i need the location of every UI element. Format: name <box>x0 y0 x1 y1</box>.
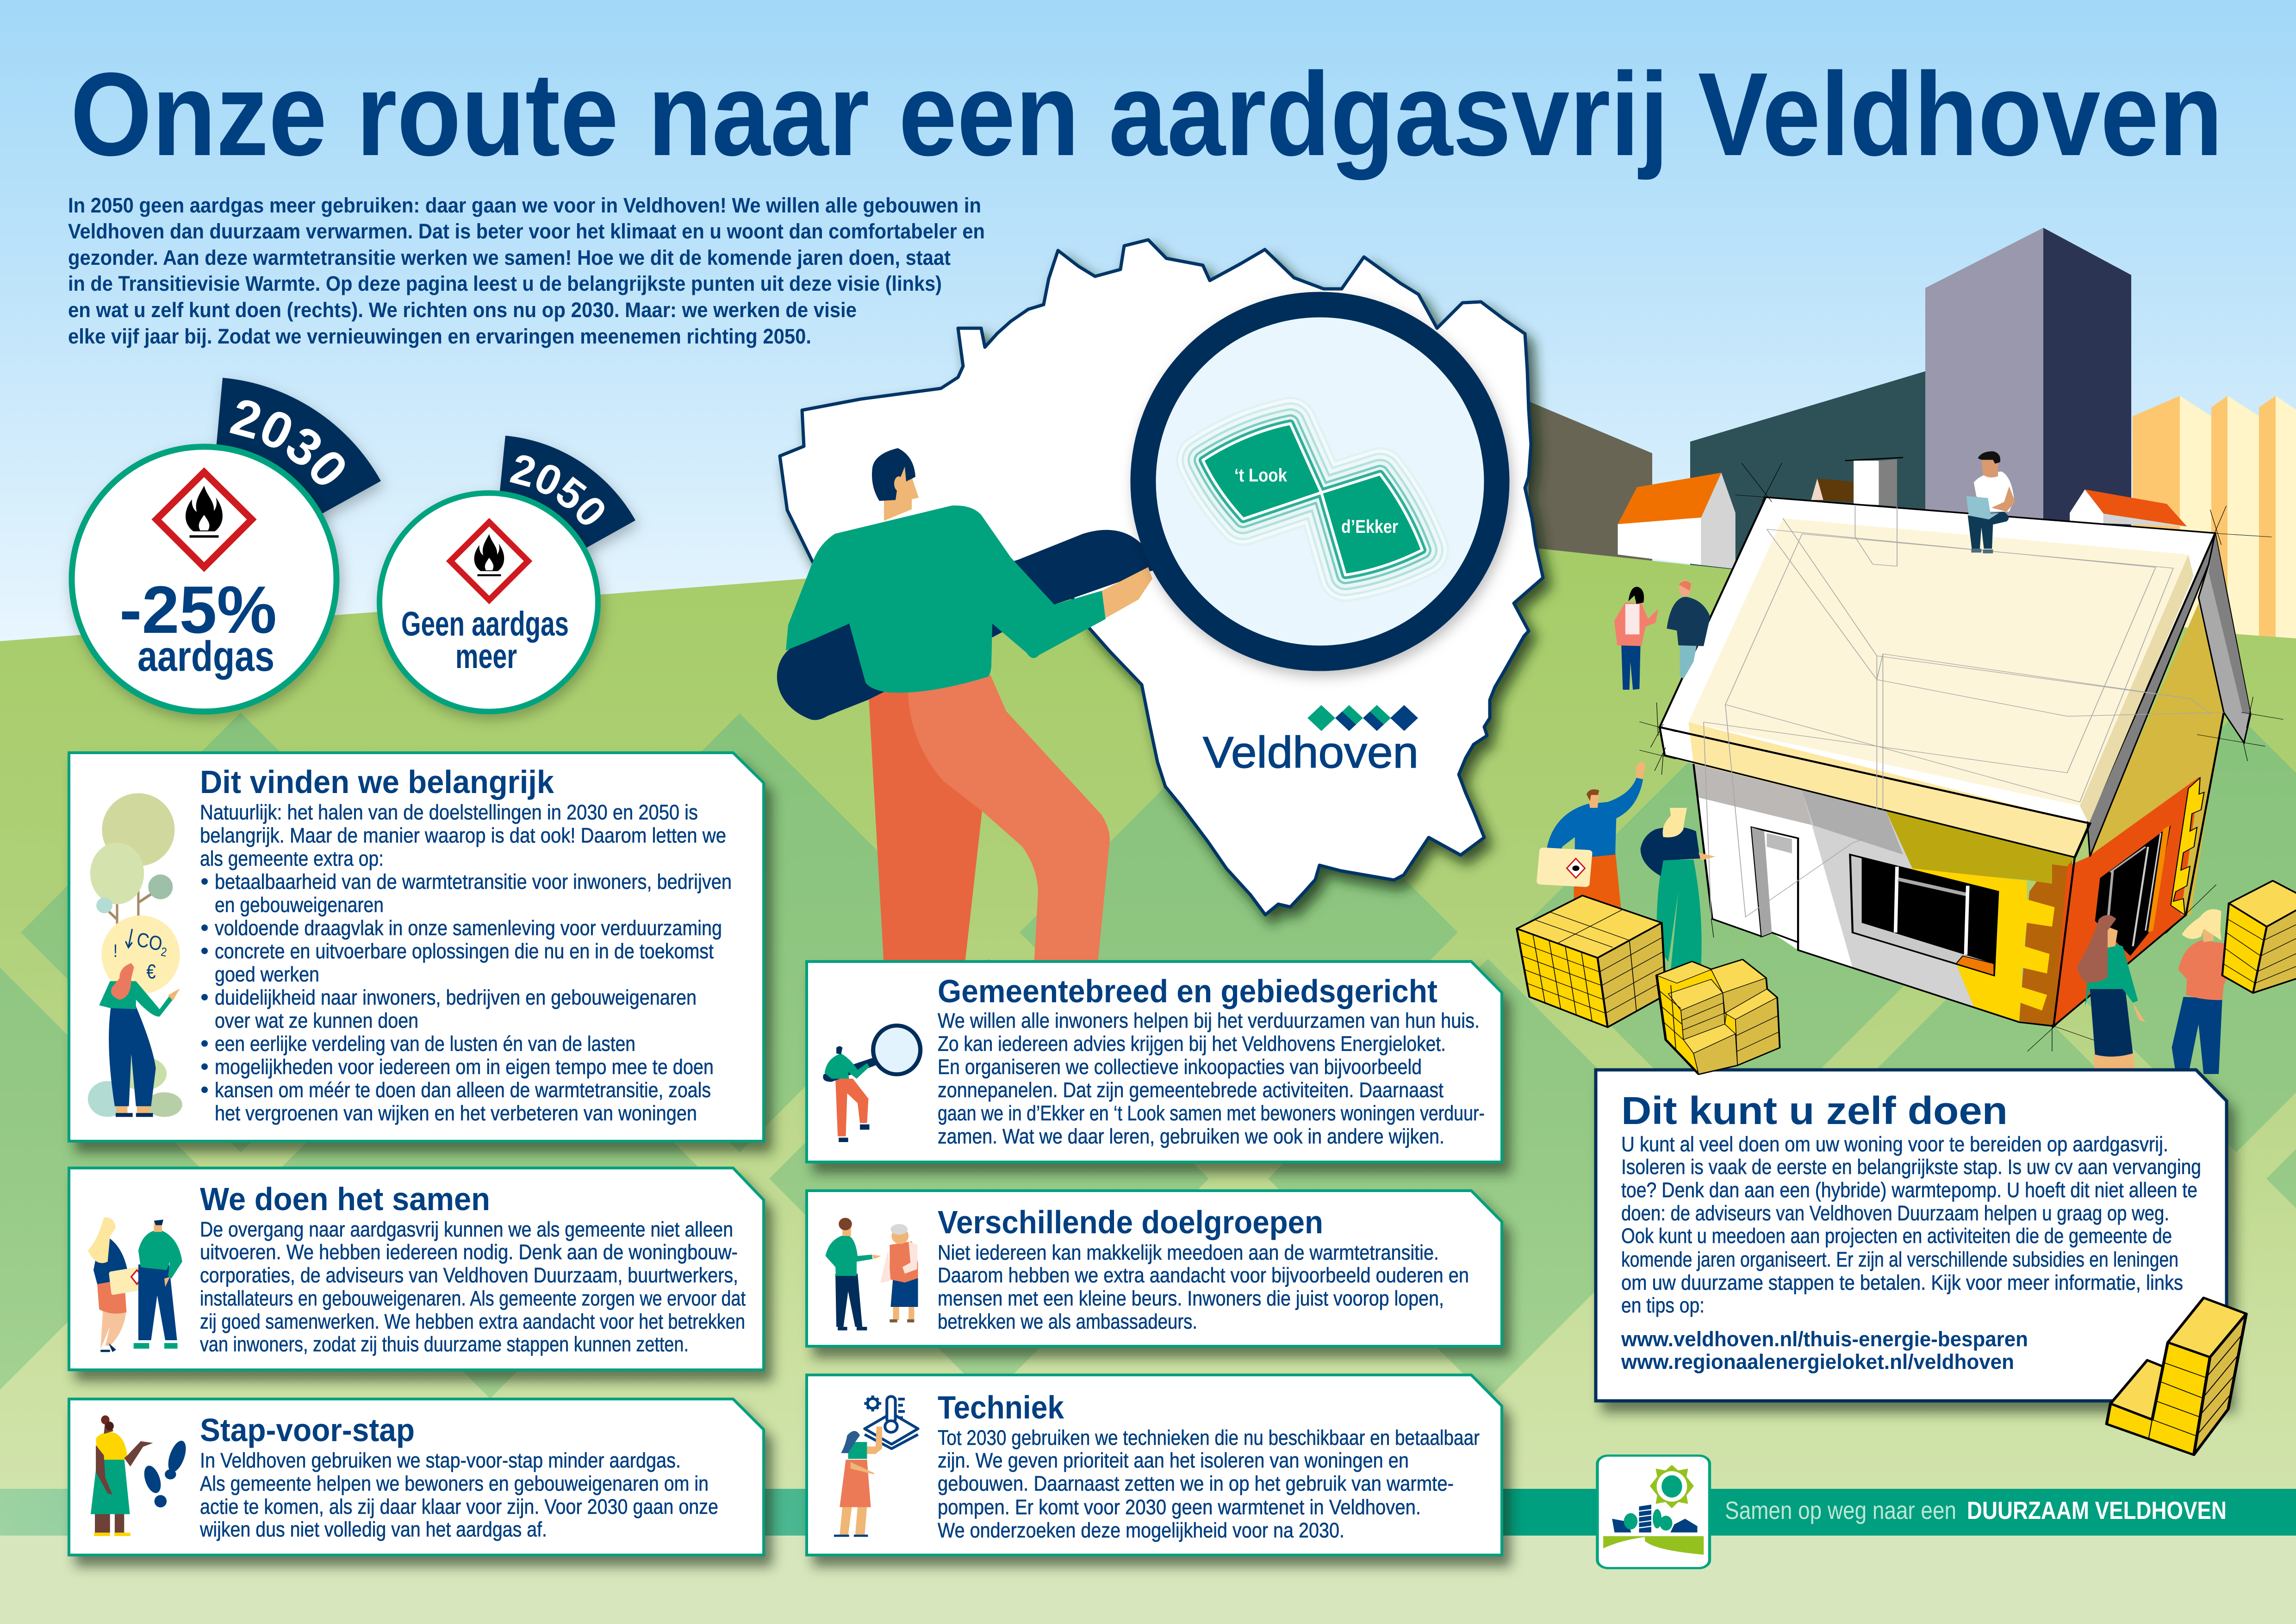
map of Veldhoven <box>780 240 1543 915</box>
body text: en tips op: <box>1621 1293 1705 1317</box>
body text: concrete en uitvoerbare oplossingen die nu en in de toekomst <box>215 939 714 963</box>
body text: Als gemeente helpen we bewoners en gebouweigenaren om in <box>200 1472 709 1495</box>
body text: In Veldhoven gebruiken we stap-voor-stap minder aardgas. <box>200 1449 681 1472</box>
insulation stack in panel corner <box>2107 1298 2246 1455</box>
Veldhoven logo: Veldhoven <box>1203 728 1419 777</box>
body text: We onderzoeken deze mogelijkheid voor na 2030. <box>938 1518 1344 1542</box>
footer slogan: Samen op weg naar een <box>1725 1497 1956 1524</box>
village houses and house under construction <box>1517 451 2296 1074</box>
green hill landscape <box>0 532 2296 1542</box>
badge 2030: -25% <box>119 572 277 647</box>
body text: Ook kunt u meedoen aan projecten en activiteiten die de gemeente de <box>1621 1224 2172 1248</box>
heading: Gemeentebreed en gebiedsgericht <box>938 973 1437 1009</box>
body text: het vergroenen van wijken en het verbeteren van woningen <box>215 1101 697 1125</box>
body text: Tot 2030 gebruiken we technieken die nu beschikbaar en betaalbaar <box>938 1426 1480 1449</box>
body text: installateurs en gebouweigenaren. Als gemeente zorgen we ervoor dat <box>200 1287 746 1310</box>
body text: pompen. Er komt voor 2030 geen warmtenet in Veldhoven. <box>938 1495 1421 1519</box>
label: 't Look: ‘t Look <box>1234 465 1288 486</box>
badge 2030: aardgas <box>137 633 274 680</box>
construction guide lines <box>1639 463 2284 1051</box>
house: door <box>1752 827 1798 942</box>
body text: U kunt al veel doen om uw woning voor te bereiden op aardgasvrij. <box>1621 1132 2168 1156</box>
person: hand <box>1102 567 1152 618</box>
badge 2050: 2050 <box>506 445 616 536</box>
building: yellow row houses <box>2133 396 2296 639</box>
districts: 't Look and d'Ekker <box>1203 424 1422 575</box>
hazard icon 2030 <box>156 472 252 567</box>
footer slogan <box>1725 1497 2227 1524</box>
body text <box>1621 1132 2201 1317</box>
building: dark teal block <box>1690 371 1925 583</box>
small house right <box>2070 489 2187 526</box>
body text: En organiseren we collectieve inkoopacties van bijvoorbeeld <box>938 1055 1422 1079</box>
logo diamonds <box>1307 705 1418 731</box>
body text: duidelijkheid naar inwoners, bedrijven en gebouweigenaren <box>215 986 697 1009</box>
footer slogan: DUURZAAM VELDHOVEN <box>1967 1497 2227 1524</box>
illustration: woman thinking with trees: ! <box>113 941 118 961</box>
people: blonde woman with crossed arms <box>2172 909 2231 1074</box>
body text: betrekken we als ambassadeurs. <box>938 1310 1197 1333</box>
intro text: in de Transitievisie Warmte. Op deze pagina leest u de belangrijkste punten uit deze visie (links) <box>68 272 942 295</box>
brown house and chimney <box>1811 457 1903 506</box>
body text: wijken dus niet volledig van het aardgas af. <box>199 1518 547 1541</box>
body text: komende jaren organiseert. Er zijn al verschillende subsidies en leningen <box>1621 1248 2178 1271</box>
intro text: In 2050 geen aardgas meer gebruiken: daar gaan we voor in Veldhoven! We willen alle gebouwen in <box>68 194 981 217</box>
people: man in blue sweater <box>1537 761 1646 911</box>
people: blonde woman in green trousers <box>1641 808 1715 969</box>
body text: Isoleren is vaak de eerste en belangrijkste stap. Is uw cv aan vervanging <box>1621 1155 2201 1179</box>
house: front wall <box>1693 764 2075 1026</box>
panel: We doen het samen <box>69 1168 764 1370</box>
body text: Natuurlijk: het halen van de doelstellingen in 2030 en 2050 is <box>200 800 698 824</box>
body text <box>199 1449 718 1541</box>
body text: doen: de adviseurs van Veldhoven Duurzaam helpen u graag op weg. <box>1621 1201 2169 1225</box>
intro text: Veldhoven dan duurzaam verwarmen. Dat is beter voor het klimaat en u woont dan comfortabeler en <box>68 219 985 243</box>
illustration: woman thinking with trees: CO <box>135 928 164 956</box>
body text: en gebouweigenaren <box>215 893 384 917</box>
intro text <box>68 194 985 348</box>
illustration: woman thinking with trees <box>88 793 182 1117</box>
heading: Dit kunt u zelf doen <box>1621 1089 2008 1132</box>
panel: Verschillende doelgroepen <box>807 1191 1502 1346</box>
illustration: man with magnifier <box>823 1025 921 1142</box>
body text: Zo kan iedereen advies krijgen bij het Veldhovens Energieloket. <box>938 1032 1446 1056</box>
body text <box>200 800 732 1125</box>
house: roof <box>1660 497 2224 919</box>
intro text: en wat u zelf kunt doen (rechts). We richten ons nu op 2030. Maar: we werken de visie <box>68 298 857 322</box>
body text: zij goed samenwerken. We hebben extra aandacht voor het betrekken <box>200 1310 745 1333</box>
insulation stack right <box>2222 881 2296 993</box>
heading: We doen het samen <box>200 1181 490 1217</box>
body text: van inwoners, zodat zij thuis duurzame stappen kunnen zetten. <box>200 1332 689 1356</box>
sky background <box>0 0 2296 648</box>
intro text: elke vijf jaar bij. Zodat we vernieuwingen en ervaringen meenemen richting 2050. <box>68 325 811 348</box>
badge 2050 <box>380 436 635 712</box>
people: man on the roof with laptop <box>1966 451 2015 553</box>
house: gable frame <box>2087 533 2251 856</box>
body text: mensen met een kleine beurs. Inwoners die juist voorop lopen, <box>938 1287 1444 1310</box>
person: sweater <box>786 506 1106 693</box>
heading: Verschillende doelgroepen <box>938 1204 1323 1240</box>
magnifier handle <box>777 518 1213 720</box>
people: woman with long brown hair <box>2078 915 2146 1071</box>
panel: Gemeentebreed en gebiedsgericht <box>807 962 1502 1162</box>
illustration: woman thinking with trees: € <box>146 960 156 983</box>
badge 2050: Geen aardgas <box>401 605 569 643</box>
house: window <box>1850 855 1998 975</box>
person: man holding magnifier, legs <box>868 675 1110 968</box>
panel: Dit vinden we belangrijk <box>69 753 764 1141</box>
magnifier lens <box>1143 305 1497 658</box>
links: www.veldhoven.nl/thuis-energie-besparen <box>1621 1327 2028 1351</box>
teal footer band <box>0 1489 2296 1536</box>
body text: om uw duurzame stappen te betalen. Kijk voor meer informatie, links <box>1621 1271 2183 1294</box>
body text: toe? Denk dan aan een (hybride) warmtepomp. U hoeft dit niet alleen te <box>1621 1178 2197 1202</box>
links: www.regionaalenergieloket.nl/veldhoven <box>1621 1350 2014 1374</box>
label: d'Ekker: d’Ekker <box>1341 517 1398 537</box>
panel: Dit kunt u zelf doen <box>1596 1070 2227 1401</box>
people: couple on the lawn <box>1614 580 1710 690</box>
illustration: man and elderly woman <box>826 1218 918 1330</box>
illustration: woman and footprints <box>91 1415 189 1536</box>
person: head <box>872 448 919 521</box>
body text: zamen. Wat we daar leren, gebruiken we ook in andere wijken. <box>938 1124 1444 1148</box>
body text: gebouwen. Daarnaast zetten we in op het gebruik van warmte- <box>938 1472 1454 1495</box>
body text: belangrijk. Maar de manier waarop is dat ook! Daarom letten we <box>200 824 726 847</box>
heading: Dit vinden we belangrijk <box>200 764 554 800</box>
building: tower <box>1925 228 2131 579</box>
body text <box>938 1009 1485 1148</box>
panel: Techniek <box>807 1375 1502 1555</box>
diamond background pattern <box>0 712 2296 1399</box>
badge 2050: meer <box>455 637 517 675</box>
body text <box>938 1426 1480 1542</box>
logo: Duurzaam Veldhoven <box>1597 1455 1710 1568</box>
small house left <box>1618 473 1736 569</box>
intro text: gezonder. Aan deze warmtetransitie werken we samen! Hoe we dit de komende jaren doen, staat <box>68 246 951 269</box>
house: side wall <box>2053 603 2224 1026</box>
body text <box>938 1241 1469 1333</box>
body text: goed werken <box>215 962 319 986</box>
badge 2030: 2030 <box>225 387 359 499</box>
body text: gaan we in d’Ekker en ‘t Look samen met bewoners woningen verduur- <box>938 1101 1485 1125</box>
body text: mogelijkheden voor iedereen om in eigen tempo mee te doen <box>215 1055 714 1079</box>
illustration: woman with thermostat icon <box>834 1395 918 1537</box>
building: grey block <box>1529 401 1652 569</box>
heading: Stap-voor-stap <box>200 1412 415 1448</box>
body text: Daarom hebben we extra aandacht voor bijvoorbeeld ouderen en <box>938 1263 1469 1287</box>
heading: Techniek <box>938 1389 1064 1425</box>
insulation stack left <box>1517 895 1666 1027</box>
body text: We willen alle inwoners helpen bij het verduurzamen van hun huis. <box>938 1009 1480 1032</box>
body text: betaalbaarheid van de warmtetransitie voor inwoners, bedrijven <box>215 870 732 893</box>
body text: zonnepanelen. Dat zijn gemeentebrede activiteiten. Daarnaast <box>938 1078 1444 1102</box>
body text: uitvoeren. We hebben iedereen nodig. Denk aan de woningbouw- <box>200 1240 738 1264</box>
illustration: woman thinking with trees: 2 <box>160 945 168 960</box>
body text: als gemeente extra op: <box>200 847 384 870</box>
body text: kansen om méér te doen dan alleen de warmtetransitie, zoals <box>215 1078 711 1102</box>
body text: voldoende draagvlak in onze samenleving voor verduurzaming <box>215 916 722 940</box>
body text: corporaties, de adviseurs van Veldhoven Duurzaam, buurtwerkers, <box>200 1263 738 1287</box>
insulation stack middle <box>1657 960 1780 1074</box>
badge 2030 <box>72 378 381 712</box>
body text: De overgang naar aardgasvrij kunnen we als gemeente niet alleen <box>200 1218 733 1241</box>
bottom ground strip <box>0 1536 2296 1624</box>
body text: actie te komen, als zij daar klaar voor zijn. Voor 2030 gaan onze <box>200 1495 718 1518</box>
panel: Stap-voor-stap <box>69 1399 764 1555</box>
body text: Niet iedereen kan makkelijk meedoen aan de warmtetransitie. <box>938 1241 1439 1264</box>
hazard icon 2050 <box>450 522 528 600</box>
links <box>1621 1327 2028 1374</box>
Veldhoven logo <box>1203 705 1419 777</box>
illustration: two people talking <box>88 1218 182 1352</box>
body text: over wat ze kunnen doen <box>215 1009 418 1032</box>
body text <box>200 1218 746 1356</box>
body text: een eerlijke verdeling van de lusten én van de lasten <box>215 1032 635 1056</box>
body text: zijn. We geven prioriteit aan het isoleren van woningen en <box>938 1449 1409 1472</box>
